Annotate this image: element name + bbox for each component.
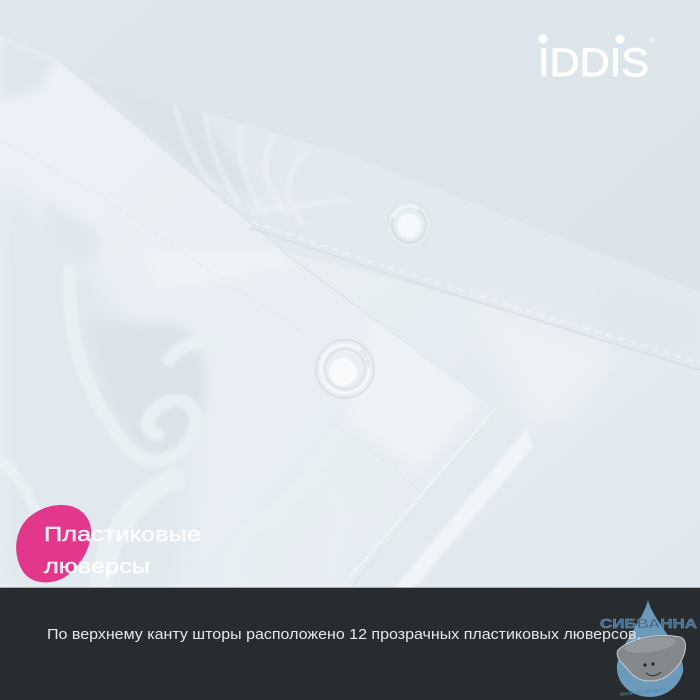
bathtub [617, 635, 686, 681]
lower right fabric [285, 252, 700, 590]
heading: Пластиковые [44, 523, 201, 546]
swirl pattern [80, 338, 200, 476]
heading: люверсы [44, 555, 150, 578]
hem stitching line [250, 222, 700, 370]
water drop [617, 600, 683, 697]
flap edge stitching [350, 409, 495, 577]
watermark: sibvanna [600, 600, 698, 698]
grommet: upper [387, 202, 431, 248]
watermark name: СИБВАННА [600, 616, 698, 631]
front flap [0, 35, 495, 590]
fold highlight [393, 428, 532, 590]
hem layer with feather pattern [202, 115, 700, 372]
description text: По верхнему канту шторы расположено 12 прозрачных пластиковых люверсов. [47, 626, 641, 643]
heading [44, 523, 201, 578]
watermark url: www.sibvanna.ru [619, 687, 665, 698]
callout: pink blob and heading [16, 505, 201, 582]
grommet: lower [316, 340, 374, 398]
footer bar [0, 587, 700, 700]
logo: iddis: IDDIS [538, 41, 649, 85]
pink accent shape [16, 505, 91, 582]
logo: iddis: ® [649, 36, 655, 45]
